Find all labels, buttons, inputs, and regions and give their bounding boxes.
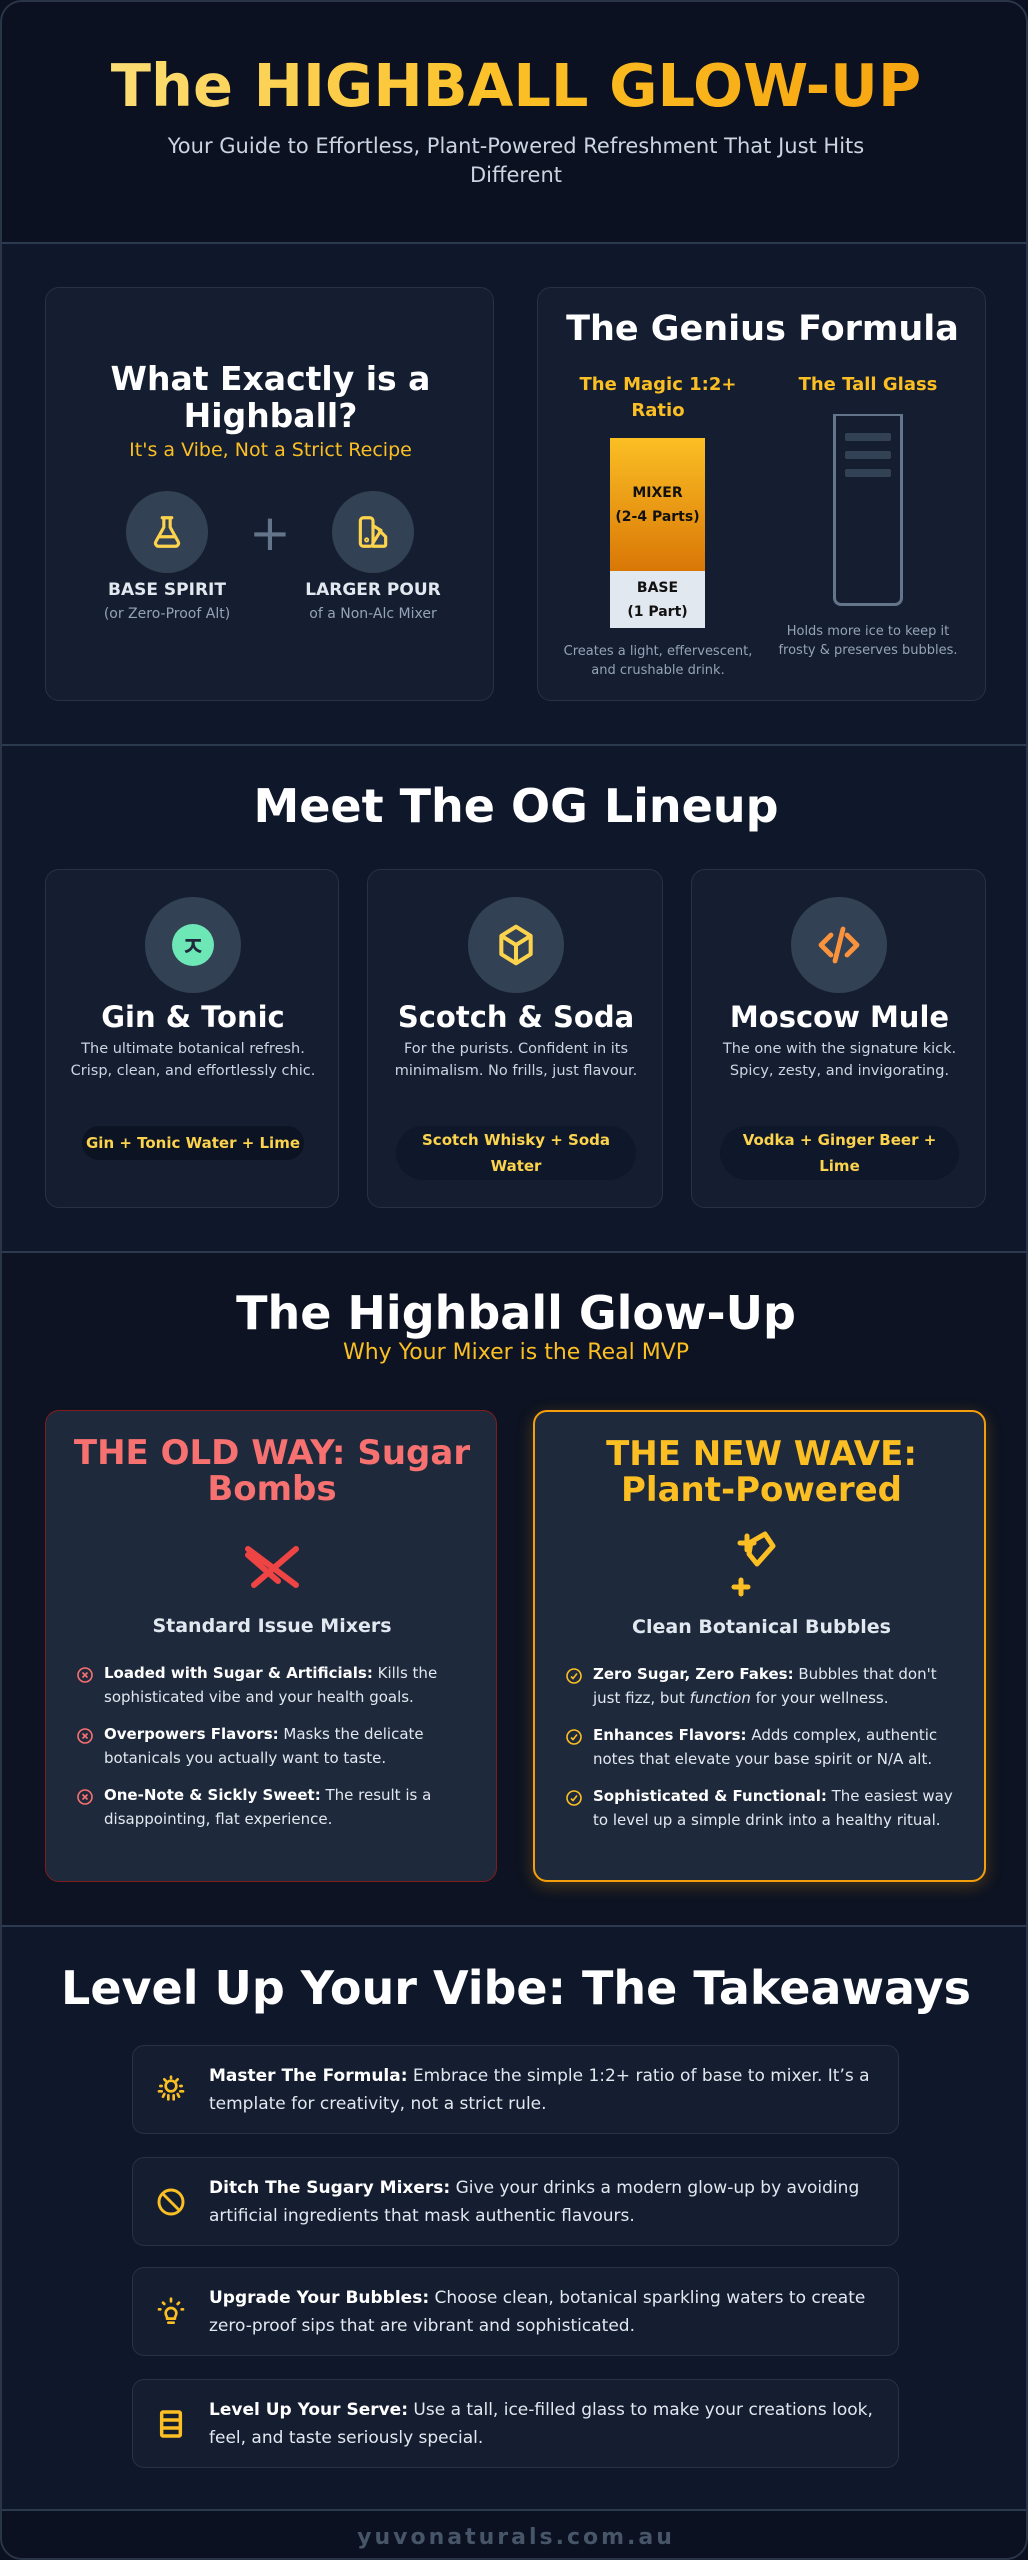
list: Sophisticated & Functional: The easiest way to level up a simple drink into a healthy ritual. [593, 1787, 953, 1829]
panel: genius formula: (2-4 Parts) [615, 508, 700, 524]
panel: genius formula [537, 287, 986, 701]
icon: glass layers [160, 2410, 182, 2438]
label: larger pour: LARGER POUR [305, 580, 441, 600]
icon: ㅈ [181, 932, 205, 962]
desc: minimalism. No frills, just flavour. [395, 1063, 637, 1079]
takeaway 4 [132, 2379, 899, 2468]
list [77, 1664, 437, 1828]
panel: genius formula: (1 Part) [627, 604, 688, 620]
icon: x [245, 1546, 299, 1588]
desc [395, 1041, 637, 1079]
tall glass [778, 374, 958, 658]
takeaway 1 [132, 2045, 899, 2134]
title: The HIGHBALL GLOW-UP [111, 51, 921, 120]
list: Overpowers Flavors: Masks the delicate botanicals you actually want to taste. [104, 1725, 424, 1767]
subheading: Standard Issue Mixers [152, 1615, 392, 1637]
label: base spirit [104, 580, 230, 622]
takeaway 2 [132, 2157, 899, 2246]
desc: Crisp, clean, and effortlessly chic. [71, 1063, 315, 1079]
title: Scotch & Soda [398, 1000, 634, 1034]
compare heading: The Highball Glow-Up [236, 1286, 796, 1340]
tall glass: The Tall Glass [799, 374, 937, 395]
panel: genius formula: Creates a light, effervescent, [564, 644, 752, 659]
icon [468, 897, 564, 993]
desc: The ultimate botanical refresh. [81, 1041, 305, 1057]
title: Gin & Tonic [101, 1000, 285, 1034]
icon [791, 897, 887, 993]
icon: wand sparkle [732, 1531, 776, 1596]
panel: genius formula: BASE [637, 580, 678, 596]
heading: THE OLD WAY: Sugar [74, 1433, 470, 1473]
text: Upgrade Your Bubbles: Choose clean, botanical sparkling waters to create zero-proof sips that are vibrant and sophisticated. [209, 2288, 865, 2336]
icon: bulb [158, 2297, 184, 2324]
icon: ban [158, 2188, 184, 2216]
card: scotch & soda [367, 869, 663, 1208]
desc: The one with the signature kick. [723, 1041, 956, 1057]
recipe pill: Vodka + Ginger Beer + [743, 1131, 936, 1149]
heading: What Exactly is a [111, 359, 430, 398]
desc [71, 1041, 315, 1079]
icon: sun [158, 2075, 184, 2101]
recipe pill [82, 1126, 304, 1160]
footer text: yuvonaturals.com.au [357, 2525, 675, 2550]
desc: For the purists. Confident in its [404, 1041, 628, 1057]
heading: THE NEW WAVE: [606, 1434, 917, 1474]
footer [2, 2509, 1028, 2560]
panel: genius formula: MIXER [632, 484, 683, 500]
takeaways heading: Level Up Your Vibe: The Takeaways [61, 1961, 971, 2015]
label: base spirit: BASE SPIRIT [108, 580, 226, 600]
title: Moscow Mule [730, 1000, 949, 1034]
list: One-Note & Sickly Sweet: The result is a disappointing, flat experience. [104, 1786, 431, 1828]
recipe pill: Lime [819, 1157, 860, 1175]
card: moscow mule [691, 869, 986, 1208]
list: Enhances Flavors: Adds complex, authentic notes that elevate your base spirit or N/A alt. [593, 1726, 937, 1768]
compare subtitle: Why Your Mixer is the Real MVP [343, 1340, 689, 1365]
recipe pill [396, 1126, 636, 1180]
icon: base spirit flask [126, 491, 208, 573]
recipe pill: Gin + Tonic Water + Lime [86, 1134, 300, 1152]
text: Master The Formula: Embrace the simple 1:2+ ratio of base to mixer. It’s a template for creativity, not a strict rule. [209, 2066, 870, 2114]
desc: Spicy, zesty, and invigorating. [730, 1063, 949, 1079]
desc [722, 1041, 956, 1079]
card: gin & tonic [45, 869, 339, 1208]
panel: genius formula: Holds more ice to keep it [787, 624, 949, 639]
list: Zero Sugar, Zero Fakes: Bubbles that don't just fizz, but function for your wellness. [593, 1665, 937, 1707]
ratio chart: The Magic 1:2+ [580, 374, 736, 395]
text: Level Up Your Serve: Use a tall, ice-filled glass to make your creations look, feel, and taste seriously special. [209, 2400, 873, 2448]
icon [145, 897, 241, 993]
takeaway 3 [132, 2267, 899, 2356]
ratio chart: Ratio [631, 400, 685, 421]
tagline: It's a Vibe, Not a Strict Recipe [129, 439, 412, 461]
heading [74, 1433, 470, 1509]
panel: what is a highball [45, 287, 494, 701]
recipe pill [720, 1126, 959, 1180]
heading [111, 359, 430, 435]
text: Ditch The Sugary Mixers: Give your drinks a modern glow-up by avoiding artificial ingredients that mask authentic flavours. [209, 2178, 859, 2226]
recipe pill: Water [491, 1157, 541, 1175]
label: larger pour [305, 580, 441, 622]
list [566, 1665, 953, 1829]
heading: Plant-Powered [621, 1470, 902, 1510]
subheading: Clean Botanical Bubbles [632, 1616, 891, 1638]
panel: new wave [533, 1410, 986, 1882]
panel: genius formula: frosty & preserves bubbles. [778, 643, 958, 658]
compare section bg [2, 1253, 1028, 1925]
heading [606, 1434, 917, 1510]
label: larger pour: of a Non-Alc Mixer [309, 606, 437, 622]
heading: The Genius Formula [566, 309, 959, 349]
label: base spirit: (or Zero-Proof Alt) [104, 606, 230, 622]
plus sign: + [249, 504, 291, 562]
subtitle: Your Guide to Effortless, Plant-Powered Refreshment That Just Hits Different [168, 134, 864, 187]
ratio chart [564, 374, 752, 678]
panel: old way [45, 1410, 497, 1882]
panel: genius formula: and crushable drink. [591, 663, 725, 678]
heading: Highball? [184, 396, 357, 435]
header [2, 2, 1028, 244]
list: Loaded with Sugar & Artificials: Kills the sophisticated vibe and your health goals. [104, 1664, 437, 1706]
recipe pill: Scotch Whisky + Soda [422, 1131, 610, 1149]
lineup heading: Meet The OG Lineup [253, 779, 779, 833]
icon: mixer [332, 491, 414, 573]
heading: Bombs [207, 1469, 337, 1509]
